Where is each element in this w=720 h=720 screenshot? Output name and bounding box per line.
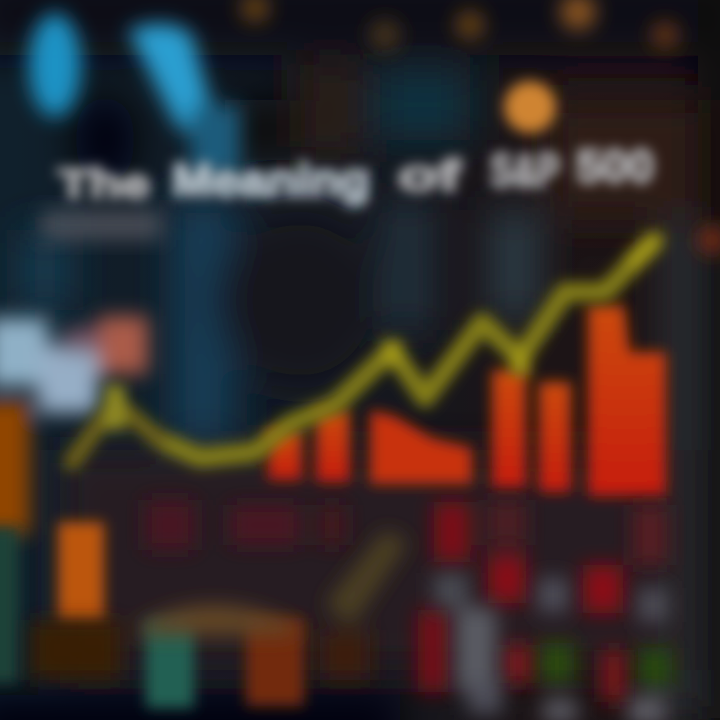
title bbox=[58, 140, 654, 207]
bar chart: grey and green candles bbox=[434, 573, 672, 720]
bar chart: red bars bbox=[268, 305, 666, 496]
bar chart: lower dark red columns bbox=[145, 500, 667, 702]
title: The bbox=[58, 160, 150, 207]
title: 500 bbox=[576, 140, 654, 192]
line chart: yellow trend line bbox=[72, 240, 655, 462]
icon: blue window lights bbox=[29, 13, 240, 175]
title: Meaning bbox=[172, 154, 370, 206]
icons: top bokeh lights bbox=[241, 0, 720, 254]
bar chart: lower left shadows and ridge bbox=[30, 530, 408, 680]
icon: orange sun bbox=[504, 81, 556, 133]
bar chart: lower left candles bbox=[0, 522, 304, 708]
title: S&P bbox=[490, 144, 560, 196]
title: of bbox=[398, 151, 461, 200]
panel: left legend cluster bbox=[0, 316, 148, 535]
subtitle bbox=[42, 210, 162, 240]
